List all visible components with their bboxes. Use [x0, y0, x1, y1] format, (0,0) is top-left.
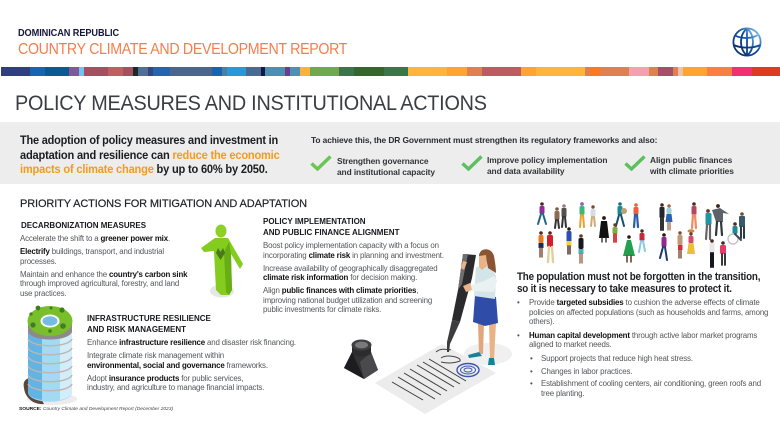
panel: policy implementation: AND PUBLIC FINANCE ALIGNMENT [263, 227, 399, 237]
sub-bullet: heat stress: • [530, 354, 533, 363]
illustration: crowd of people [537, 202, 745, 268]
item: align public finances [650, 155, 734, 176]
panel: policy implementation: climate risk information for decision making. [263, 273, 417, 282]
text: insurance: Adopt insurance products for public services, [87, 374, 243, 383]
panel: population transition: so it is necessary to take measures to protect it. [517, 283, 732, 295]
statement text: The adoption of policy measures and investment in [20, 134, 278, 147]
icon: check 1 [310, 155, 332, 171]
panel: population transition: Support projects that reduce high heat stress. [541, 354, 693, 363]
panel: population transition: tree planting. [541, 389, 584, 398]
panel: policy implementation: incorporating climate risk in planning and investment. [263, 250, 444, 260]
regulatory intro text: To achieve this, the DR Government must strengthen its regulatory frameworks and also: [311, 135, 657, 145]
illustration: green figure [201, 224, 243, 298]
panel: policy implementation: improving national budget utilization and screening [263, 296, 432, 304]
item: improve policy implementation: and data availability [487, 166, 564, 176]
background band: summary panel [0, 122, 780, 184]
text: electrify: Electrify buildings, transport, and industrial [20, 247, 164, 256]
heading: population: The population must not be forgotten in the transition, [517, 271, 760, 283]
item: strengthen governance [337, 156, 435, 177]
panel: decarbonization measures: processes. [20, 256, 57, 266]
item: strengthen governance: and institutional capacity [337, 167, 435, 177]
item: align public finances: Align public finances [650, 155, 732, 165]
heading: decarbonization: DECARBONIZATION MEASURES [21, 220, 146, 230]
text: resilience financing: Enhance infrastructure resilience and disaster risk financing. [87, 338, 296, 347]
illustration: signed document [376, 344, 496, 414]
person group: bottom right [660, 229, 726, 267]
person group: bottom left [538, 227, 584, 263]
bullet: human capital: • [517, 331, 520, 340]
text: integrate risk: Integrate climate risk management within [87, 351, 224, 360]
colour stripe [1, 67, 780, 76]
person group: top right [660, 202, 745, 244]
icon: check 3 [624, 155, 646, 171]
panel: population transition: Changes in labor practices. [541, 367, 632, 376]
report title: COUNTRY CLIMATE AND DEVELOPMENT REPORT [18, 41, 347, 58]
source note: SOURCE: Country Climate and Development Report (December 2023) [19, 407, 173, 412]
statement text: adaptation and resilience can reduce the economic [20, 149, 280, 162]
panel: infrastructure resilience: industry, and agriculture to manage financial impacts. [87, 383, 264, 392]
person group: top centre [599, 202, 638, 242]
text: boost capacity: Boost policy implementation capacity with a focus on [263, 241, 439, 250]
sub-bullet: cooling centers: • [530, 379, 533, 388]
item: align public finances: with climate priorities [650, 166, 734, 176]
panel: policy implementation: public investments for climate risks. [263, 305, 381, 314]
illustration: ink bottle [344, 340, 378, 379]
item: improve policy implementation [487, 155, 607, 176]
panel: infrastructure resilience [87, 313, 296, 392]
sub-bullet: labor practices: • [530, 367, 533, 376]
panel: population transition: others). [529, 317, 554, 326]
bullet: targeted subsidies: • [517, 298, 520, 307]
heading: policy implementation: POLICY IMPLEMENTATION [263, 216, 366, 226]
panel: policy implementation [263, 216, 444, 314]
panel: infrastructure resilience: environmental, social and governance frameworks. [87, 360, 268, 370]
panel: decarbonization measures: through improved agricultural, forestry, and land [20, 279, 179, 288]
item: improve policy implementation: Improve policy implementation [487, 155, 607, 165]
panel: population transition: aligned to market needs. [529, 340, 612, 349]
heading: infrastructure: INFRASTRUCTURE RESILIENCE [87, 313, 211, 323]
illustration: woman holding giant pen [447, 249, 512, 365]
country label: DOMINICAN REPUBLIC [18, 28, 119, 39]
panel: population transition [517, 271, 768, 398]
text: power mix: Accelerate the shift to a greener power mix. [20, 234, 170, 243]
panel: infrastructure resilience: AND RISK MANAGEMENT [87, 324, 186, 334]
statement text [20, 134, 280, 176]
text: carbon sink: Maintain and enhance the country's carbon sink [20, 270, 187, 278]
section heading: PRIORITY ACTIONS FOR MITIGATION AND ADAPTATION [20, 198, 307, 210]
person group: bottom centre [623, 229, 645, 262]
panel: decarbonization measures [20, 220, 188, 298]
illustration: green-roof building [24, 306, 77, 405]
item: strengthen governance: Strengthen governance [337, 156, 428, 166]
panel: population transition: Provide targeted subsidies to cushion the adverse effects of climate [529, 298, 760, 307]
panel: population transition: policies on affected populations (such as households and farms, among [529, 308, 768, 317]
panel: population transition: Human capital development through active labor market programs [529, 331, 757, 340]
icon: check 2 [461, 155, 483, 171]
main title: POLICY MEASURES AND INSTITUTIONAL ACTIONS [15, 92, 487, 115]
panel: decarbonization measures: use practices. [20, 288, 66, 298]
text: data availability: Increase availability of geographically disaggregated [263, 264, 437, 272]
statement text: impacts of climate change by up to 60% by 2050. [20, 163, 268, 176]
text: align finances: Align public finances with climate priorities, [263, 286, 418, 295]
icon: World Bank globe logo [732, 28, 762, 56]
person group: top left [538, 202, 596, 228]
panel: population transition: Establishment of cooling centers, air conditioning, green roofs and [541, 379, 761, 388]
